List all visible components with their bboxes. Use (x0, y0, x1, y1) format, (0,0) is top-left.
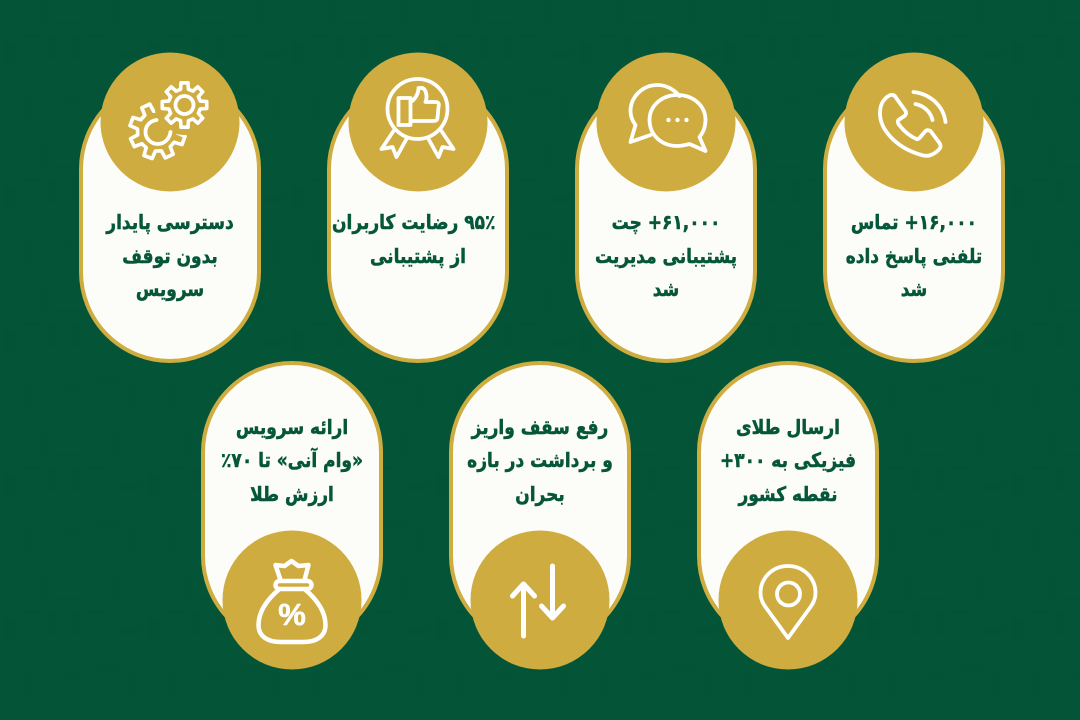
card: support chats (575, 52, 757, 363)
card background (449, 361, 631, 647)
icon: up and down arrows (470, 530, 610, 670)
icon: money bag with percent: % (278, 597, 305, 632)
card: user satisfaction (327, 52, 509, 363)
card: limits removed (449, 361, 631, 670)
text: support chats (595, 210, 737, 301)
icon: location pin (718, 530, 858, 670)
card background (327, 78, 509, 363)
text: user satisfaction: ۹۵٪ رضایت کاربران (332, 210, 495, 234)
text: physical gold delivery: نقطه کشور (738, 482, 838, 506)
text: uninterrupted access: بدون توقف (122, 244, 218, 268)
card background (823, 78, 1005, 363)
icon: money bag with percent (222, 530, 362, 670)
card background (79, 78, 261, 363)
text: phone calls: شد (901, 277, 927, 301)
card background (575, 78, 757, 363)
text: limits removed: بحران (515, 482, 565, 506)
text: physical gold delivery: فیزیکی به ۳۰۰+ (720, 448, 856, 472)
card: physical gold delivery (697, 361, 879, 670)
text: support chats: ۶۱,۰۰۰+ چت (612, 210, 720, 234)
card background (697, 361, 879, 647)
text: instant loan: ارائه سرویس (236, 414, 348, 438)
card: uninterrupted access (79, 52, 261, 363)
text: support chats: شد (653, 277, 679, 301)
text: instant loan: ارزش طلا (250, 482, 334, 506)
icon: thumbs-up medal (348, 52, 488, 192)
text: uninterrupted access: سرویس (136, 277, 204, 301)
card: phone calls (823, 52, 1005, 363)
text: phone calls: ۱۶,۰۰۰+ تماس (851, 210, 977, 234)
text: instant loan (221, 414, 363, 506)
text: support chats: پشتیبانی مدیریت (595, 244, 737, 268)
icon: gears (100, 52, 240, 192)
text: limits removed: رفع سقف واریز (472, 414, 608, 438)
text: phone calls (846, 210, 982, 301)
icon: phone (844, 52, 984, 192)
icon: chat bubbles (596, 52, 736, 192)
card background (201, 361, 383, 647)
text: physical gold delivery (720, 414, 856, 506)
text: limits removed (467, 414, 613, 506)
text: uninterrupted access (105, 210, 234, 302)
text: user satisfaction: از پشتیبانی (370, 244, 466, 268)
text: phone calls: تلفنی پاسخ داده (846, 244, 982, 268)
card: instant loan (201, 361, 383, 670)
text: uninterrupted access: دسترسی پایدار (106, 210, 234, 234)
text: physical gold delivery: ارسال طلای (736, 414, 840, 438)
text: limits removed: و برداشت در بازه (467, 448, 613, 472)
text: user satisfaction (332, 210, 495, 268)
text: instant loan: «وام آنی» تا ۷۰٪ (221, 448, 363, 472)
